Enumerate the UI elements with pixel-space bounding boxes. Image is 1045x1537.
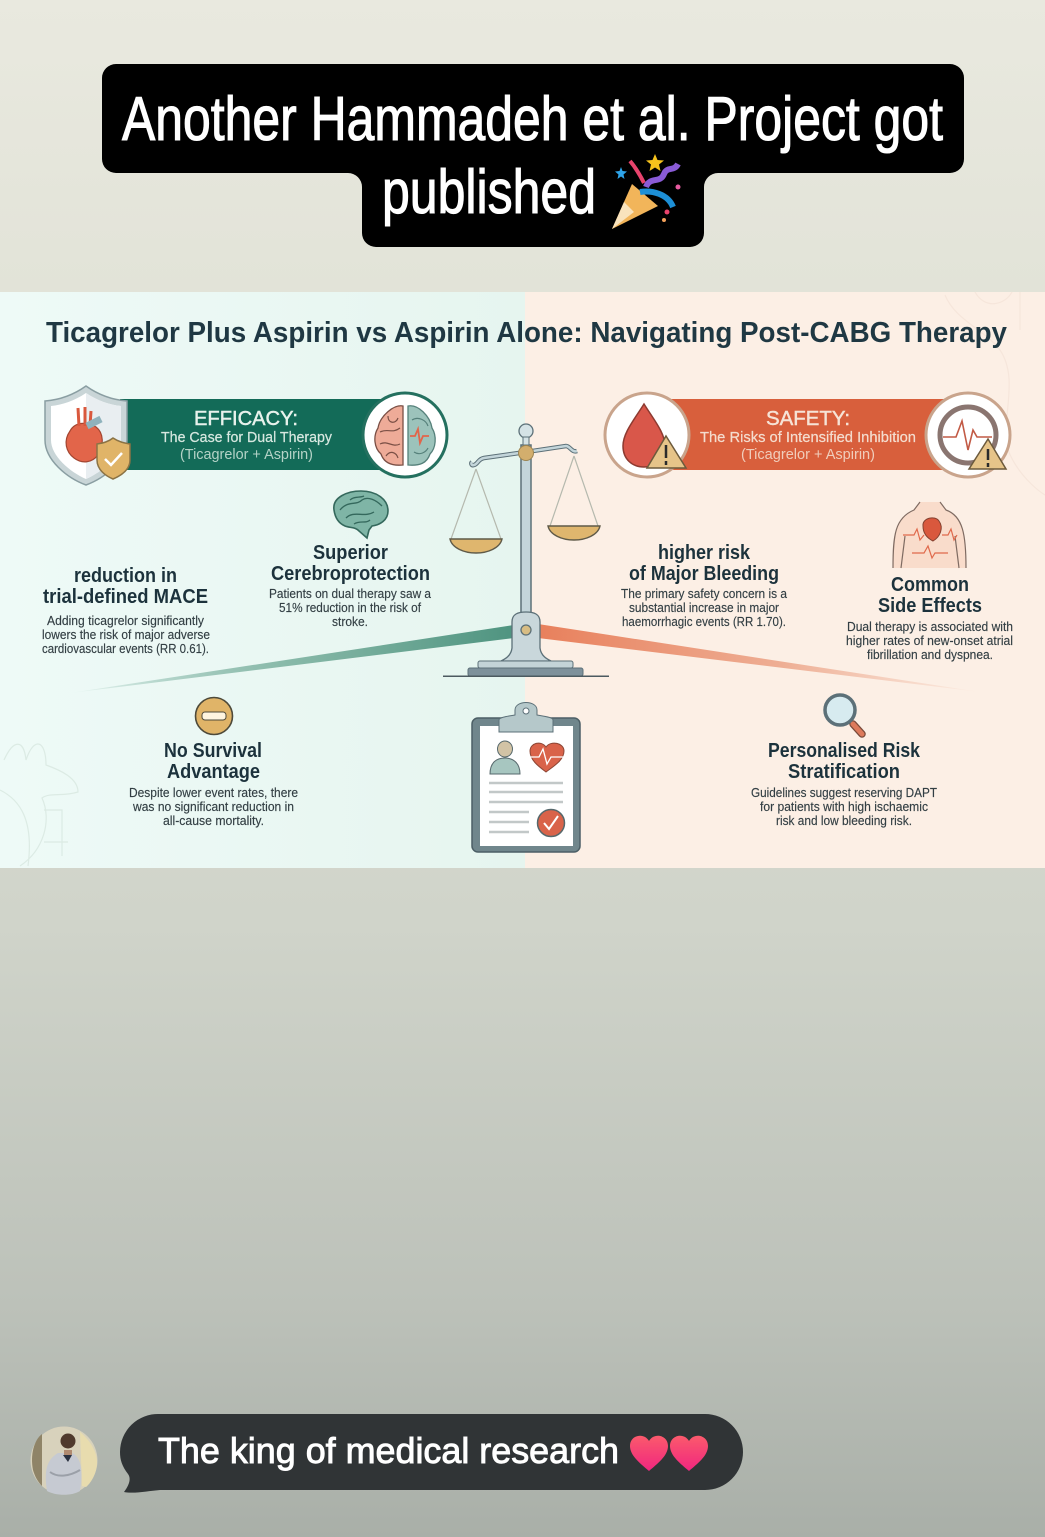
infographic panel — [0, 292, 1045, 868]
block: reduction in MACE: Adding ticagrelor significantly — [47, 613, 204, 628]
icon: party popper — [612, 154, 680, 229]
comment bubble: The king of medical research — [158, 1430, 619, 1471]
block: common side effects: higher rates of new-onset atrial — [846, 633, 1013, 648]
block: no survival advantage: was no significant reduction in — [132, 799, 294, 814]
icon: torso with heart — [893, 502, 966, 568]
panel: efficacy side background — [0, 292, 525, 868]
watermark: anatomical heart right — [945, 292, 1045, 495]
banner: safety: SAFETY: — [766, 407, 850, 430]
block: major bleeding: of Major Bleeding — [629, 563, 779, 585]
caption banner: published — [382, 158, 596, 227]
balance wedge: safety — [538, 624, 980, 692]
block: major bleeding: haemorrhagic events (RR 1.70). — [622, 614, 786, 629]
block: personalised risk stratification — [751, 740, 937, 828]
icon: magnifying glass — [825, 695, 862, 734]
block: superior cerebroprotection — [269, 542, 432, 629]
icon: two hearts — [630, 1436, 708, 1471]
title: Ticagrelor Plus Aspirin vs Aspirin Alone: Navigating Post-CABG Therapy — [46, 317, 1007, 349]
block: common side effects: Side Effects — [878, 595, 982, 617]
banner: efficacy — [45, 386, 447, 485]
block: superior cerebroprotection: stroke. — [332, 614, 368, 629]
block: common side effects — [846, 574, 1013, 662]
block: major bleeding: higher risk — [658, 542, 751, 564]
icon: heart monitor with warning — [926, 393, 1010, 477]
block: superior cerebroprotection: Patients on dual therapy saw a — [269, 586, 432, 601]
balance wedge: efficacy — [70, 625, 514, 693]
banner: safety: The Risks of Intensified Inhibition — [700, 430, 916, 446]
icon: balance scale — [443, 424, 609, 677]
icon: brain in circle — [363, 393, 447, 477]
block: no survival advantage — [129, 740, 298, 828]
block: reduction in MACE: trial-defined MACE — [43, 586, 208, 608]
icon: shield with heart — [45, 386, 130, 485]
block: superior cerebroprotection: Cerebroprotection — [271, 563, 430, 585]
banner: safety: (Ticagrelor + Aspirin) — [741, 447, 875, 463]
block: no survival advantage: all-cause mortality. — [163, 813, 264, 828]
icon: clipboard — [472, 702, 580, 852]
banner: efficacy: The Case for Dual Therapy — [161, 430, 333, 446]
block: personalised risk stratification: risk and low bleeding risk. — [776, 813, 912, 828]
block: reduction in MACE — [42, 565, 210, 656]
block: common side effects: fibrillation and dyspnea. — [867, 647, 993, 662]
block: superior cerebroprotection: 51% reduction in the risk of — [279, 600, 421, 615]
caption banner — [102, 64, 964, 247]
block: personalised risk stratification: for patients with high ischaemic — [760, 799, 928, 814]
block: no survival advantage: No Survival — [164, 740, 262, 762]
block: no survival advantage: Despite lower event rates, there — [129, 785, 298, 800]
block: major bleeding — [621, 542, 788, 629]
icon: green brain — [334, 491, 388, 538]
banner: efficacy: EFFICACY: — [194, 407, 298, 430]
watermark: anatomical heart left — [0, 744, 78, 866]
block: no survival advantage: Advantage — [167, 761, 260, 783]
comment bubble — [120, 1414, 743, 1493]
block: common side effects: Common — [891, 574, 969, 596]
block: reduction in MACE: cardiovascular events (RR 0.61). — [42, 641, 209, 656]
avatar — [30, 1426, 98, 1495]
banner: safety — [605, 393, 1010, 477]
panel: safety side background — [525, 292, 1045, 868]
block: personalised risk stratification: Guidelines suggest reserving DAPT — [751, 785, 937, 800]
block: major bleeding: The primary safety concern is a — [621, 586, 788, 601]
block: major bleeding: substantial increase in major — [629, 600, 780, 615]
icon: blood drop with warning — [605, 393, 689, 477]
block: reduction in MACE: reduction in — [74, 565, 177, 587]
block: personalised risk stratification: Stratification — [788, 761, 900, 783]
block: superior cerebroprotection: Superior — [313, 542, 388, 564]
block: personalised risk stratification: Personalised Risk — [768, 740, 921, 762]
block: common side effects: Dual therapy is associated with — [847, 619, 1013, 634]
icon: minus circle — [196, 698, 232, 734]
banner: efficacy: (Ticagrelor + Aspirin) — [180, 447, 313, 463]
block: reduction in MACE: lowers the risk of major adverse — [42, 627, 210, 642]
